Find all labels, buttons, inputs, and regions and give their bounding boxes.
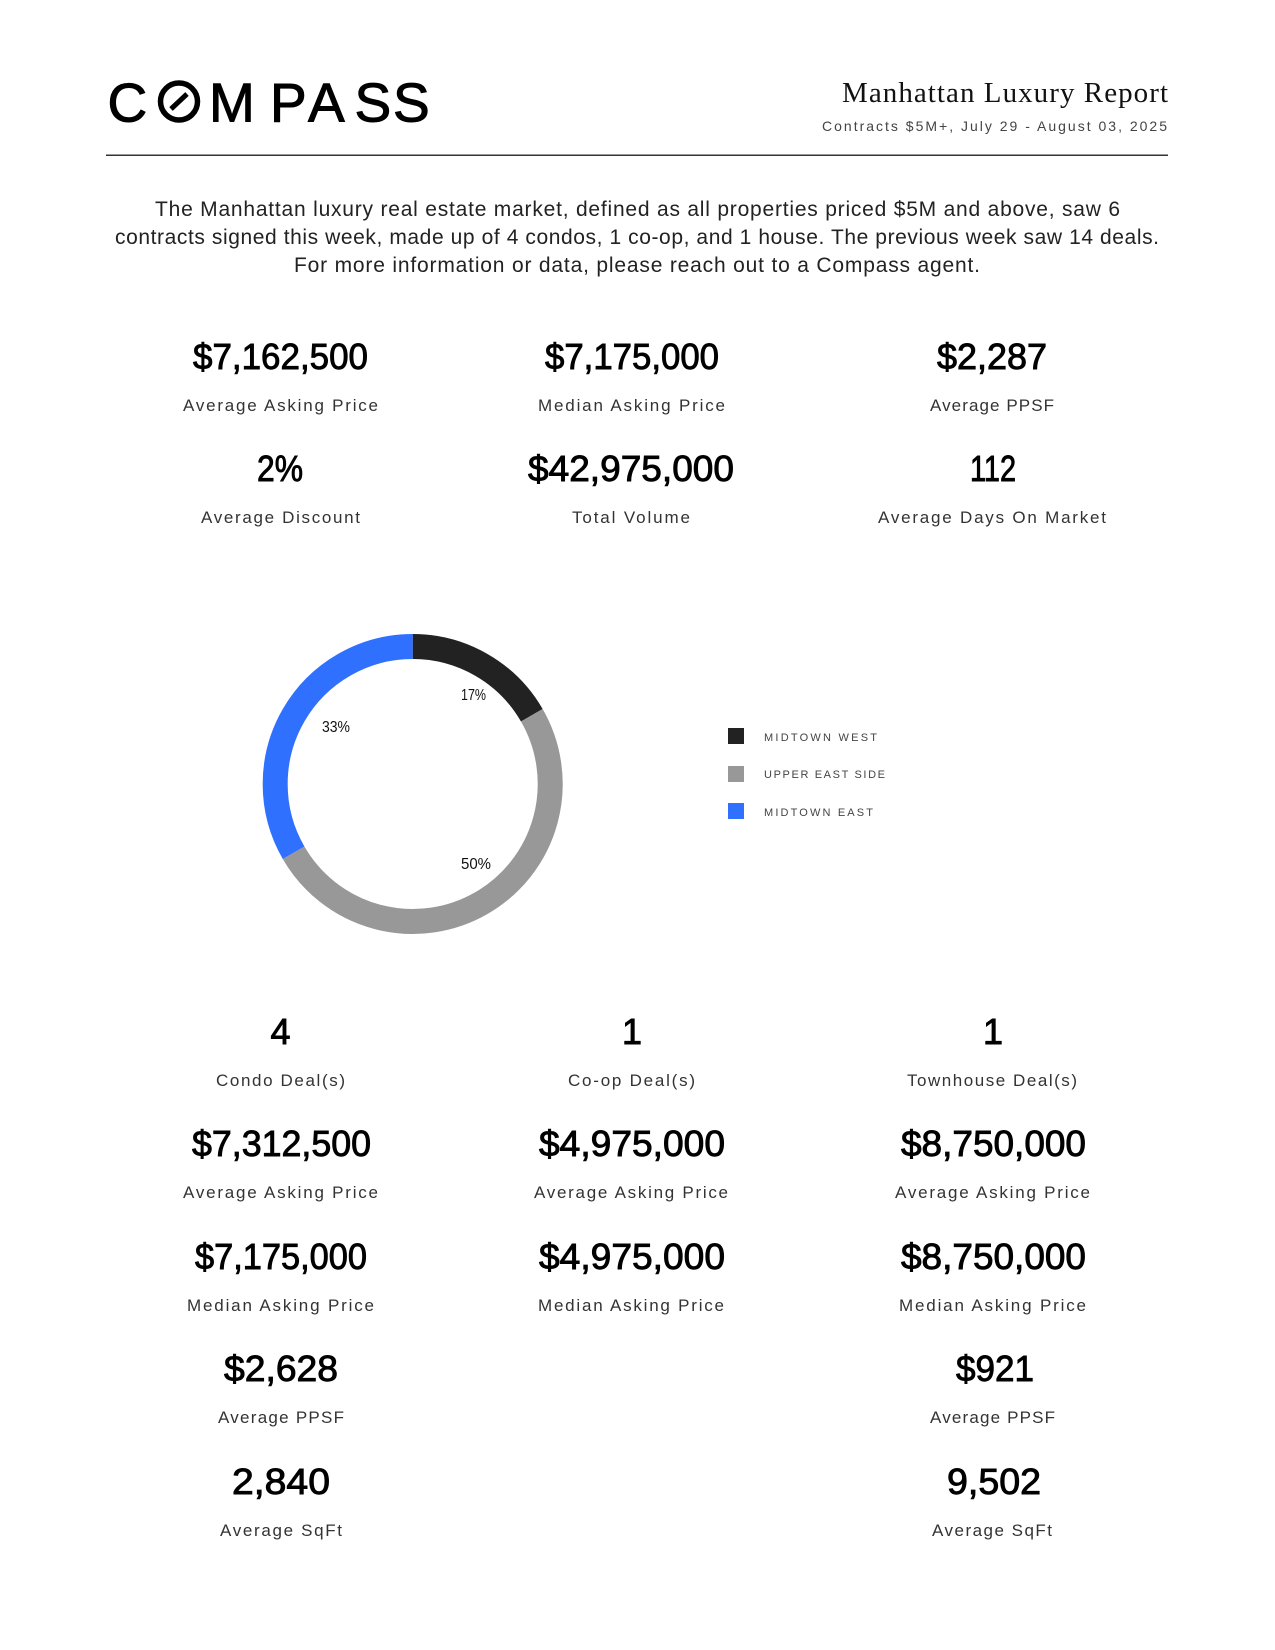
header — [108, 72, 1168, 134]
chart legend — [728, 728, 885, 819]
stat: townhouse average square feet: 9,502 — [947, 1461, 1041, 1502]
stat: co-op median asking price — [538, 1236, 725, 1315]
stat: condo average PPSF: Average PPSF — [218, 1408, 344, 1427]
stat: townhouse deals: 1 — [983, 1011, 1003, 1052]
stat: condo average asking price: Average Asking Price — [183, 1183, 378, 1202]
stat: co-op deals: Co-op Deal(s) — [568, 1071, 695, 1090]
stat: townhouse average asking price: Average Asking Price — [895, 1183, 1090, 1202]
stat: townhouse average PPSF: $921 — [956, 1348, 1034, 1389]
stat: average days on market: 112 — [970, 448, 1016, 489]
stat: average discount — [201, 448, 360, 527]
stat: average asking price: Average Asking Price — [183, 396, 378, 415]
stat: median asking price — [538, 336, 725, 415]
chart legend: MIDTOWN EAST — [764, 807, 873, 819]
stat: average PPSF: Average PPSF — [930, 396, 1054, 415]
stat: condo median asking price: Median Asking Price — [187, 1296, 374, 1315]
report date range: Contracts $5M+, July 29 - August 03, 2025 — [822, 118, 1167, 134]
stat: total volume: Total Volume — [572, 508, 690, 527]
stat: co-op average asking price: Average Asking Price — [534, 1183, 728, 1202]
stat: co-op median asking price: Median Asking Price — [538, 1296, 724, 1315]
stat: condo deals: Condo Deal(s) — [216, 1071, 345, 1090]
stat: townhouse average asking price: $8,750,000 — [901, 1123, 1086, 1164]
stat: co-op median asking price: $4,975,000 — [539, 1236, 725, 1277]
stat: condo average square feet — [220, 1461, 342, 1540]
donut chart: deals by neighborhood: 50% — [461, 856, 491, 873]
stat: condo deals: 4 — [270, 1011, 290, 1052]
stat: total volume — [528, 448, 734, 527]
chart legend: UPPER EAST SIDE — [764, 769, 885, 781]
stat: townhouse deals: Townhouse Deal(s) — [907, 1071, 1077, 1090]
donut chart: deals by neighborhood: 33% — [322, 719, 350, 736]
stat: co-op deals — [568, 1011, 695, 1090]
stat: condo median asking price: $7,175,000 — [195, 1236, 367, 1277]
stat: townhouse average PPSF — [930, 1348, 1055, 1427]
panel: co-op statistics — [534, 1011, 728, 1315]
stat: average days on market — [878, 448, 1106, 527]
stat: co-op average asking price: $4,975,000 — [539, 1123, 725, 1164]
intro paragraph: The Manhattan luxury real estate market, defined as all properties priced $5M and above, saw 6 — [155, 198, 1120, 221]
stat: condo average PPSF: $2,628 — [224, 1348, 338, 1389]
stat: townhouse median asking price: $8,750,000 — [901, 1236, 1086, 1277]
stat: townhouse average PPSF: Average PPSF — [930, 1408, 1055, 1427]
stat: condo deals — [216, 1011, 345, 1090]
stat: condo average square feet: Average SqFt — [220, 1521, 342, 1540]
stat: median asking price: Median Asking Price — [538, 396, 725, 415]
intro paragraph — [115, 198, 1159, 277]
stat: condo average asking price — [183, 1123, 378, 1202]
stat: co-op deals: 1 — [622, 1011, 642, 1052]
donut chart: deals by neighborhood — [275, 646, 550, 922]
stat: townhouse average square feet: Average SqFt — [932, 1521, 1052, 1540]
stat: townhouse average square feet — [932, 1461, 1052, 1540]
stat: condo average asking price: $7,312,500 — [192, 1123, 371, 1164]
stat: townhouse median asking price — [899, 1236, 1086, 1315]
stat: townhouse average asking price — [895, 1123, 1090, 1202]
stat: average PPSF — [930, 336, 1054, 415]
intro paragraph: contracts signed this week, made up of 4 condos, 1 co-op, and 1 house. The previous week saw 14 deals. — [115, 226, 1159, 249]
stat: condo average square feet: 2,840 — [232, 1461, 330, 1502]
logo: Compass: COMPASS — [108, 72, 430, 134]
stat: average discount: Average Discount — [201, 508, 360, 527]
stat: condo average PPSF — [218, 1348, 344, 1427]
stat: condo median asking price — [187, 1236, 374, 1315]
stat: co-op average asking price — [534, 1123, 728, 1202]
stat: townhouse deals — [907, 1011, 1077, 1090]
donut chart: deals by neighborhood: 17% — [461, 687, 486, 704]
stat: average days on market: Average Days On Market — [878, 508, 1106, 527]
chart legend: MIDTOWN WEST — [764, 732, 877, 744]
stat: average asking price — [183, 336, 378, 415]
stat: townhouse median asking price: Median Asking Price — [899, 1296, 1086, 1315]
stat: median asking price: $7,175,000 — [545, 336, 719, 377]
stat: average PPSF: $2,287 — [937, 336, 1047, 377]
stat: average discount: 2% — [257, 448, 303, 489]
stat: total volume: $42,975,000 — [528, 448, 734, 489]
panel: condo statistics — [183, 1011, 378, 1540]
intro paragraph: For more information or data, please reach out to a Compass agent. — [294, 254, 980, 277]
panel: townhouse statistics — [895, 1011, 1090, 1540]
report title: Manhattan Luxury Report — [842, 77, 1168, 109]
stat: average asking price: $7,162,500 — [193, 336, 368, 377]
panel: overall market statistics — [183, 336, 1106, 527]
